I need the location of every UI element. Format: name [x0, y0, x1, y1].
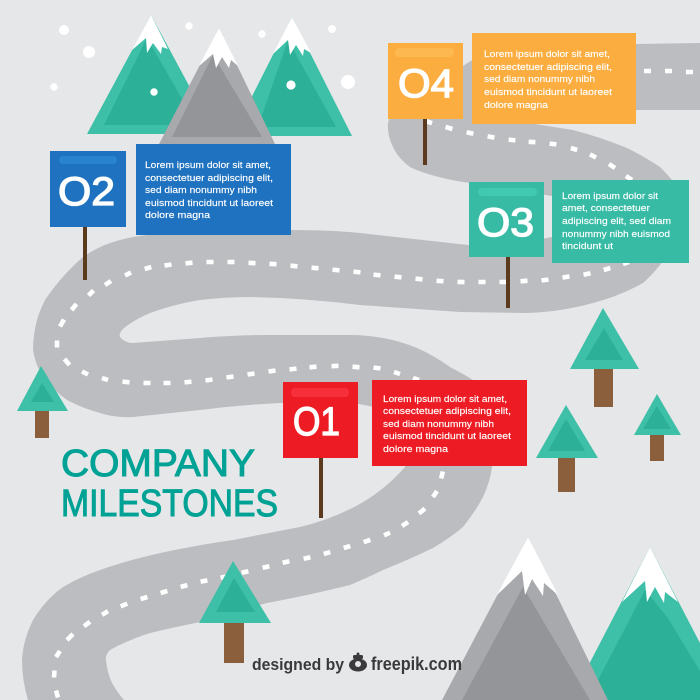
freepik credit — [252, 652, 462, 674]
tree: bottom centre — [199, 561, 271, 663]
milestone 04: orange sign and text: sed diam nonummy nibh — [484, 74, 595, 85]
milestone 01: red sign and text — [283, 380, 527, 518]
milestone 04: orange sign and text: Lorem ipsum dolor sit amet, — [484, 49, 610, 60]
milestone 04: orange sign and text: dolore magna — [484, 100, 549, 111]
tree: far left — [17, 366, 68, 438]
milestone 04: orange sign and text: consectetuer adipiscing elit, — [484, 62, 612, 73]
mountain range: bottom right — [442, 537, 700, 700]
milestone 02: blue sign and text: euismod tincidunt ut laoreet — [145, 198, 273, 209]
icon: freepik mascot — [349, 652, 367, 672]
mountain range: top — [50, 15, 355, 146]
milestone 03: teal sign and text: O3 — [477, 201, 534, 245]
milestone 03: teal sign and text — [469, 180, 689, 308]
milestone 02: blue sign and text — [50, 144, 291, 280]
milestone 01: red sign and text: sed diam nonummy nibh — [383, 419, 494, 430]
tree: middle right — [536, 405, 598, 492]
mountain: centre grey — [158, 28, 276, 146]
milestone 01: red sign and text: consectetuer adipiscing elit, — [383, 406, 511, 417]
mountain: bottom grey — [442, 537, 608, 700]
milestone 01: red sign and text: euismod tincidunt ut laoreet — [383, 431, 511, 442]
milestone 02: blue sign and text: Lorem ipsum dolor sit amet, — [145, 160, 271, 171]
milestone 02: blue sign and text: consectetuer adipiscing elit, — [145, 173, 273, 184]
milestone 02: blue sign and text: O2 — [58, 170, 115, 214]
milestone 02: blue sign and text: sed diam nonummy nibh — [145, 185, 257, 196]
mountain: bottom green — [560, 547, 700, 700]
milestone 01: red sign and text: O1 — [293, 400, 340, 444]
tree: upper right large — [570, 308, 639, 407]
tree: far right small — [634, 394, 681, 461]
milestone 04: orange sign and text: euismod tincidunt ut laoreet — [484, 87, 612, 98]
mountain: right green — [232, 17, 352, 136]
milestone 03: teal sign and text: Lorem ipsum dolor sit — [562, 191, 658, 202]
snowflake dots — [50, 22, 355, 96]
milestone 03: teal sign and text: adipiscing elit, sed diam — [562, 216, 671, 227]
title: MILESTONES — [61, 483, 278, 525]
milestone 03: teal sign and text: tincidunt ut — [562, 241, 613, 252]
mountain: left green — [87, 15, 215, 134]
title: COMPANY — [61, 443, 255, 485]
freepik credit: freepik.com — [371, 654, 462, 674]
milestone 03: teal sign and text: amet, consectetuer — [562, 203, 651, 214]
milestone 03: teal sign and text: nonummy nibh euismod — [562, 229, 670, 240]
title — [61, 443, 278, 525]
milestone 04: orange sign and text — [388, 33, 636, 165]
freepik credit: designed by — [252, 655, 345, 674]
milestone 02: blue sign and text: dolore magna — [145, 210, 211, 221]
milestone 01: red sign and text: dolore magna — [383, 444, 449, 455]
milestone 01: red sign and text: Lorem ipsum dolor sit amet, — [383, 394, 507, 405]
milestone 04: orange sign and text: O4 — [398, 62, 454, 106]
